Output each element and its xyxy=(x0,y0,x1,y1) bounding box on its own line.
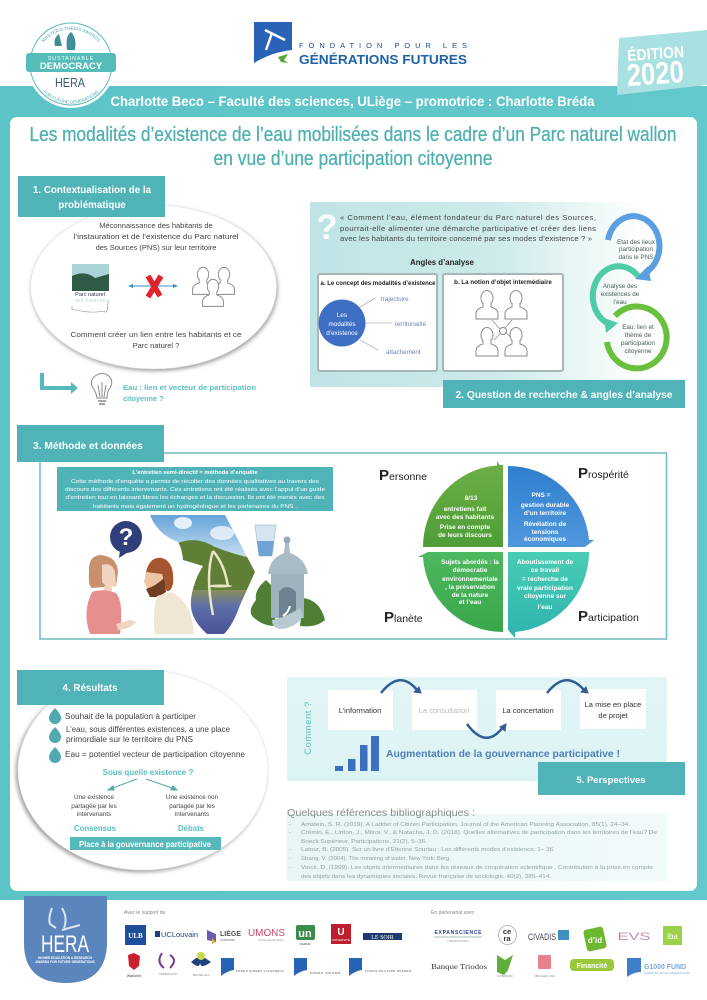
text: existence partagée: partagée par les xyxy=(71,803,117,810)
badge: édition 2020 xyxy=(617,30,707,95)
quadrant: Participation: Aboutissement de xyxy=(517,559,574,566)
logo: Fonds Inbev: FONDS INFORM xyxy=(310,971,341,975)
heading: section 4: 4. Résultats xyxy=(62,683,118,694)
logo: d'id: d’id xyxy=(588,936,602,945)
box: la mise en place: La mise en place xyxy=(585,700,641,709)
logo: Fédération Wallonie-Bruxelles: FÉDÉRATION xyxy=(159,971,177,976)
footer: HERA shield: HIGHER EDUCATION & RESEARCH xyxy=(38,956,93,960)
text: cycle labels xyxy=(601,239,656,355)
text: references list: - xyxy=(289,865,291,871)
chart: process cycle arrows xyxy=(593,216,667,368)
logo: UMONS: Université de Mons xyxy=(258,938,284,942)
quadrant: Participation: = recherche de xyxy=(522,576,568,583)
heading: section 3: 3. Méthode et données xyxy=(33,441,143,452)
logo: G1000 fund: FONDS POUR LES GÉNÉRATIONS xyxy=(644,970,690,975)
logo: Fédération Wallonie-Bruxelles xyxy=(159,953,177,976)
illustration: water landscape xyxy=(150,515,255,634)
text: research question xyxy=(340,213,596,243)
text: existence non partagée: intervenants xyxy=(175,811,209,818)
logo: Fonds Inbev xyxy=(294,958,341,976)
text box: entretien semi-directif: L’entretien semi-directif = méthode d’enquête xyxy=(132,470,258,476)
text: references list: - xyxy=(289,822,291,828)
heading: section 4 xyxy=(17,670,164,705)
labels: 4P: Planète xyxy=(384,609,423,626)
bar: place à la gouvernance xyxy=(70,837,221,850)
logo: Sustainable Democracy award badge: SUSTAINABLE xyxy=(48,56,94,62)
logo: Sustainable Democracy award badge: DEMOCRACY xyxy=(40,61,103,72)
text: references list: des objets dans les dynamiques sociales. Revue française de sociologie, 40(2), 385–414. xyxy=(301,874,552,880)
text: cycle labels: Eau: lien et xyxy=(622,324,654,331)
text: cycle labels: thème de xyxy=(625,332,652,339)
arrows: two branches xyxy=(108,779,177,790)
footer: support logos: Avec le support de xyxy=(124,910,166,916)
text: méconnaissance xyxy=(74,221,239,252)
box: la concertation xyxy=(496,690,561,730)
logo: Wallonie: Wallonie xyxy=(127,974,141,978)
logo: ULB xyxy=(125,925,146,945)
box a: modalités d'existence: Les xyxy=(337,312,347,319)
arrow: teal xyxy=(593,266,638,333)
text box: entretien semi-directif xyxy=(57,467,333,511)
text box: entretien semi-directif: d’entretien tout en laissant libres les échanges et la discussion. Ils ont été menés avec des xyxy=(66,495,325,501)
quadrant: Planète: Sujets abordés : la xyxy=(441,559,499,566)
text: references list: Arnstein, S. R. (2019). A Ladder of Citizen Participation. Journal of the American Planning Association, 85(1), 24–34. xyxy=(301,822,631,828)
text: augmentation: Augmentation de la gouvernance participative ! xyxy=(386,748,620,760)
logo: Université de Namur: un xyxy=(298,928,312,940)
logo: Fonds Albert Vigoureux xyxy=(221,958,284,976)
box: la consultation: La consultation xyxy=(419,706,469,715)
quadrant: Prospérité: économiques xyxy=(524,536,566,543)
text: references list: - xyxy=(289,856,291,862)
heading: section 3 xyxy=(17,425,164,462)
logo: Cosucoo xyxy=(497,955,513,978)
logo: Université de Namur: NAMUR xyxy=(300,942,311,946)
text: question: Comment créer un lien entre les habitants et ce xyxy=(70,330,242,339)
bar: place à la gouvernance: Place à la gouvernance participative xyxy=(79,840,212,849)
text: eau lien et vecteur: Eau : lien et vecteur de participation xyxy=(123,383,256,392)
text: méconnaissance: Méconnaissance des habitants de xyxy=(99,221,213,230)
footer: HERA shield: HERA xyxy=(41,931,89,958)
quadrant: Personne: Prise en compte xyxy=(440,524,490,531)
logo: red square: BRULER 2013 xyxy=(535,974,555,978)
logo: Fonds Albert Vigoureux: FONDS ALBERT VIGOUREUX xyxy=(236,969,284,973)
logo: Parc naturel des Sources: Parc naturel xyxy=(75,292,105,298)
author line: Charlotte Beco – Faculté des sciences, ULiège – promotrice : Charlotte Bréda xyxy=(110,93,595,109)
logo: Université Saint-Louis: UNIVERSITÉ xyxy=(332,937,350,942)
text: results bullets: Souhait de la population à participer xyxy=(65,712,196,721)
panel: 3. méthode et données xyxy=(17,425,666,639)
logo: Fondation pour les Générations Futures: GÉNÉRATIONS FUTURES xyxy=(299,52,467,67)
logo: G1000 fund: G1000 FUND xyxy=(644,964,686,971)
text: references list: Crémin, E., Linton, J., Mitroi, V., & Natacha, J. D. (2018). Quelles alternatives de participation dans les territoires de l’eau? De xyxy=(301,830,657,836)
logo: Sustainable Democracy award badge: FOR FUTURE GENERATIONS xyxy=(44,90,98,104)
logo: Fondation pour les Générations Futures xyxy=(254,22,467,67)
text: existence non partagée: Une existence non xyxy=(166,794,219,801)
logo: Université de Namur xyxy=(296,925,315,946)
panel: 1. contextualisation xyxy=(18,176,278,404)
logo: Cera: ce xyxy=(503,927,511,936)
quadrant: Participation: ce travail xyxy=(531,567,559,574)
logo: Liège université: LIÈGE xyxy=(220,929,241,938)
box a: modalités d'existence xyxy=(318,274,437,371)
box a: modalités d'existence: d’existence xyxy=(326,330,358,337)
white central panel xyxy=(10,117,697,891)
text: references list: Vinck, D. (1999). Les objets intermédiaires dans les réseaux de coopération scientifique . Contribution à la prise en compte xyxy=(301,865,653,871)
text: results bullets xyxy=(65,712,246,759)
text: existence non partagée: partagée par les xyxy=(169,803,215,810)
illustration: speech bubble xyxy=(110,521,142,558)
logo: Liège université: université xyxy=(220,938,235,942)
logo: Parc naturel des Sources: des Sources xyxy=(75,298,106,304)
logo: Triodos: Banque Triodos xyxy=(431,962,487,971)
logo: Fondation pour les Générations Futures: FONDATION POUR LES xyxy=(299,41,467,50)
footer: support logos xyxy=(124,910,411,978)
logo: Expanscience: EXPANSCIENCE xyxy=(434,930,482,936)
panel: references xyxy=(287,807,667,881)
text: sous quelle existence: Sous quelle existence ? xyxy=(103,768,193,777)
text: cycle labels: participation xyxy=(619,246,653,253)
logo: Le Soir xyxy=(363,933,402,941)
box a: modalités d'existence: attachement xyxy=(386,349,421,356)
logo: Université Saint-Louis xyxy=(331,924,351,944)
footer: HERA shield: AWARDS FOR FUTURE GENERATIONS xyxy=(35,960,95,964)
quadrant: Personne xyxy=(423,461,503,547)
heading: section 2: 2. Question de recherche & angles d’analyse xyxy=(456,390,673,401)
text: consensus: Consensus xyxy=(74,824,117,833)
logo: EVS: EVS xyxy=(618,931,650,943)
text: eau lien et vecteur: citoyenne ? xyxy=(123,394,164,403)
heading: section 5: 5. Perspectives xyxy=(576,775,646,786)
quadrant: Personne: entretiens fait xyxy=(444,506,487,513)
quadrant: Planète: et l’eau xyxy=(459,599,481,606)
text: méconnaissance: des Sources (PNS) sur leur territoire xyxy=(96,243,216,252)
logo: Financité: Financité xyxy=(577,963,607,970)
logo: red square xyxy=(535,955,555,978)
arrows: curved steps xyxy=(381,680,588,738)
chart: 4P quadrants xyxy=(379,461,639,638)
box: la consultation xyxy=(412,690,477,730)
badge: édition 2020: ÉDITION xyxy=(627,42,685,65)
quadrant: Planète xyxy=(418,552,503,632)
box a: modalités d'existence: trajectoire xyxy=(381,296,409,303)
chart: rising bars xyxy=(335,736,379,771)
illustration: glass of water xyxy=(255,525,276,556)
text: cycle labels: existences de xyxy=(601,291,640,298)
logo: Fonds Philippe Wiener: FONDS PHILIPPE WIENER xyxy=(365,969,411,973)
logo: IBA xyxy=(663,926,682,945)
logo: Fonds Philippe Wiener xyxy=(349,958,411,976)
logo: Sustainable Democracy award badge: HERA xyxy=(55,75,85,90)
footer: partner logos: En partenariat avec xyxy=(431,910,475,916)
logo: Expanscience xyxy=(434,930,482,943)
logo: G1000 fund xyxy=(627,958,690,977)
logo: Parc naturel des Sources xyxy=(72,264,109,312)
quadrant: Prospérité: d’un territoire xyxy=(524,510,567,517)
text: cycle labels: participation xyxy=(621,340,655,347)
badge: édition 2020: 2020 xyxy=(626,54,685,93)
heading: angles d'analyse: Angles d’analyse xyxy=(410,258,475,267)
text: results bullets: primordiale sur le territoire du PNS xyxy=(66,735,193,744)
logo: Liège université xyxy=(207,929,241,944)
text: references list: Latour, B. (2005). Sur un livre d’Étienne Souriau : Les différents modes d’existence, 1– 36. xyxy=(301,846,556,853)
labels: 4P xyxy=(379,465,639,626)
logo: d'id xyxy=(583,926,607,952)
footer: HERA shield xyxy=(24,896,107,983)
quadrant: Participation xyxy=(508,552,589,638)
heading: section 5 xyxy=(538,762,685,795)
box: la concertation: La concertation xyxy=(502,706,554,715)
logo: UCLouvain: UCLouvain xyxy=(161,930,198,939)
logo: Wallonie xyxy=(127,953,141,978)
text: existence partagée xyxy=(71,794,117,818)
text: existence partagée: intervenants xyxy=(77,811,111,818)
heading: references: Quelques références bibliographiques : xyxy=(287,807,475,819)
label: comment ?: Comment ? xyxy=(303,701,314,755)
text box: entretien semi-directif: habitants mais également un hydrogéologue et les partenaires du PNS . xyxy=(93,504,297,510)
logo: ULB: ULB xyxy=(128,932,143,940)
panel: 4. résultats xyxy=(16,670,268,872)
logo: IBA: iba xyxy=(667,932,678,941)
ellipse body xyxy=(30,205,276,369)
logo: Sustainable Democracy award badge xyxy=(26,22,116,108)
text box: entretien semi-directif: discours des différents intervenants. Ces entretiens ont été réalisés avec l’appui d’un guide xyxy=(65,487,325,493)
quadrant: Participation: vraie participation xyxy=(517,585,573,592)
quadrant: Personne: 8/13 xyxy=(465,495,478,502)
text: existence partagée: Une existence xyxy=(74,794,114,801)
quadrant: Participation: citoyenne sur xyxy=(524,593,567,600)
heading: section 2 xyxy=(443,380,685,408)
heading: section 1 xyxy=(18,176,165,217)
box a: modalités d'existence: modalités xyxy=(329,321,355,328)
logo: Civadis: CIVADIS xyxy=(528,932,556,942)
quadrant: Planète: démocratie xyxy=(453,567,488,574)
text: references list: Boeck Supérieur, Participations, 21(2), 5–36. xyxy=(301,839,428,845)
illustration: speech bubble: ? xyxy=(119,524,133,551)
arrow: elbow xyxy=(42,373,78,394)
text: existence non partagée xyxy=(166,794,219,818)
box: l'information xyxy=(328,690,393,730)
box: la mise en place: de projet xyxy=(598,711,629,720)
text: results bullets: L’eau, sous différentes existences, a une place xyxy=(66,725,231,734)
text: references list: Strang, V. (2004). The meaning of water, New York: Berg. xyxy=(301,856,451,862)
text: cycle labels: Analyse des xyxy=(603,283,637,290)
text: research question: avec les habitants du territoire concerné par ses modes d’existence ? » xyxy=(340,234,592,243)
logo: UMONS: UMONS xyxy=(248,928,285,939)
icon: light bulb xyxy=(91,374,112,404)
box a: modalités d'existence: territorialité xyxy=(395,321,427,328)
text: references list: - xyxy=(289,830,291,836)
labels: 4P: Prospérité xyxy=(578,465,629,482)
text: cycle labels: Etat des lieux xyxy=(617,239,656,246)
text box: entretien semi-directif: Cette méthode d’enquête a permis de récolter des données qualitatives au travers des xyxy=(71,479,319,485)
logo: Le Soir: LE SOIR xyxy=(371,935,394,941)
panel: 5. perspectives xyxy=(287,677,685,795)
arrow: green xyxy=(607,306,667,368)
illustration: man xyxy=(144,558,194,634)
quadrant: Participation: l’eau xyxy=(538,604,552,611)
logo: Région de Bruxelles xyxy=(191,952,211,977)
logo: Expanscience: LABORATOIRES xyxy=(447,939,469,943)
logo: Financité xyxy=(570,959,614,971)
icons: water drop bullets xyxy=(49,708,61,763)
box a: modalités d'existence: a. Le concept des modalités d’existence xyxy=(320,280,436,287)
icon: question mark: ? xyxy=(316,208,338,247)
text: question: Parc naturel ? xyxy=(133,341,179,350)
logo: Université Saint-Louis: U xyxy=(337,927,345,938)
footer: partner logos xyxy=(431,910,690,978)
text: question xyxy=(70,330,242,350)
logo: Région de Bruxelles: BRUXELLES xyxy=(193,973,209,977)
logo: Cera: ra xyxy=(503,934,511,943)
icon: residents group xyxy=(193,267,234,306)
quadrant: Prospérité: gestion durable xyxy=(521,502,570,509)
quadrant: Planète: , la préservation xyxy=(445,584,495,591)
quadrant: Personne: de leurs discours xyxy=(438,532,492,539)
text: méconnaissance: l’instauration et de l’existence du Parc naturel xyxy=(74,232,239,241)
text: references list: - xyxy=(289,847,291,853)
illustration: woman xyxy=(86,555,137,634)
logo: Cosucoo: COSUCOO xyxy=(497,974,513,978)
box b: objet intermédiaire: b. La notion d’objet intermédiaire xyxy=(454,279,552,286)
quadrant: Personne: avec des habitants xyxy=(436,514,494,521)
heading: section 1: 1. Contextualisation de la xyxy=(33,185,152,196)
quadrant: Prospérité: PNS = xyxy=(532,492,551,499)
logo: Sustainable Democracy award badge: MASTER'S THESIS AWARDS xyxy=(42,26,100,42)
quadrant: Prospérité xyxy=(508,466,594,547)
arrow: broken link between park and residents xyxy=(128,276,178,297)
heading: section 1: problématique xyxy=(58,200,126,211)
text: research question: pourrait-elle alimenter une démarche participative et créer des liens xyxy=(340,224,596,233)
quadrant: Planète: de la nature xyxy=(452,592,489,599)
labels: 4P: Participation xyxy=(578,608,639,625)
box b: objet intermédiaire xyxy=(443,274,563,371)
quadrant: Prospérité: tensions xyxy=(532,529,559,536)
text: cycle labels: l’eau xyxy=(613,299,627,306)
text: references list xyxy=(289,822,657,880)
logo: Cera xyxy=(498,926,516,944)
quadrant: Planète: environnementale xyxy=(442,576,498,583)
box: la mise en place xyxy=(580,689,646,729)
text: results bullets: Eau = potentiel vecteur de participation citoyenne xyxy=(65,750,246,759)
arrow: blue xyxy=(608,216,659,281)
title xyxy=(30,124,676,170)
text: eau lien et vecteur xyxy=(123,383,256,403)
text: débats: Débats xyxy=(178,824,205,833)
panel: 2. question de recherche xyxy=(310,202,685,408)
text: cycle labels: citoyenne xyxy=(625,348,652,355)
ellipse body xyxy=(18,670,268,870)
box: l'information: L’information xyxy=(339,706,381,715)
quadrant: Prospérité: Révélation de xyxy=(524,521,567,528)
title: en vue d’une participation citoyenne xyxy=(214,148,492,170)
text: cycle labels: dans le PNS xyxy=(618,254,654,261)
labels: 4P: Personne xyxy=(379,467,427,484)
text: research question: « Comment l’eau, élément fondateur du Parc naturel des Sources, xyxy=(340,213,596,222)
illustration: fountain xyxy=(251,536,325,629)
